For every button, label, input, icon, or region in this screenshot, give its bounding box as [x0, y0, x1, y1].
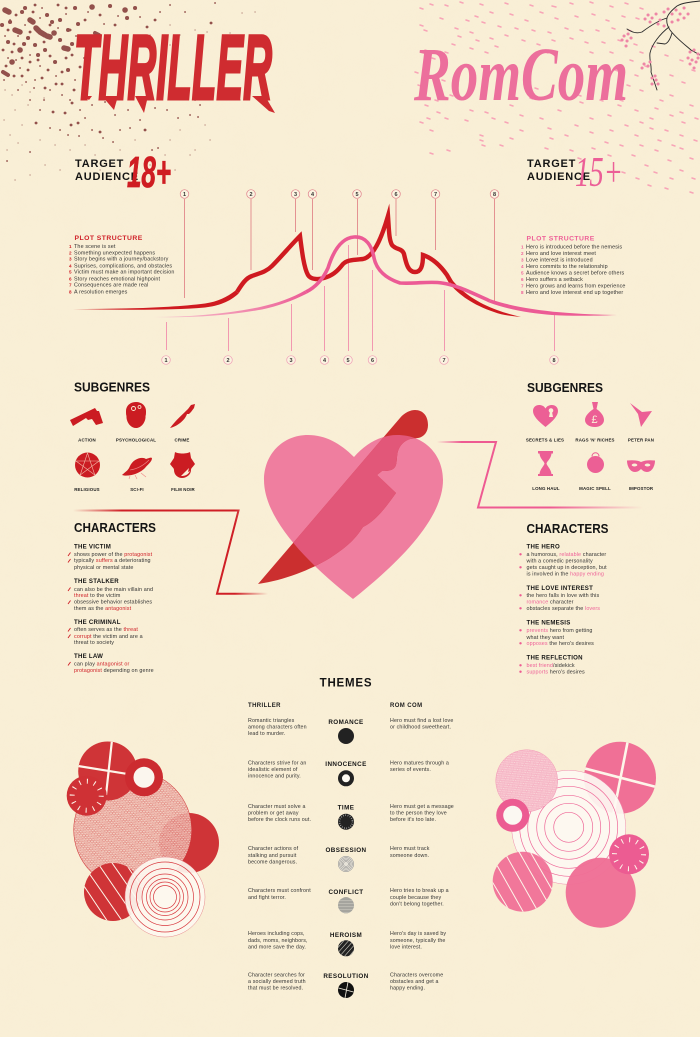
plot structure rom com: Audience knows a secret before others: [526, 270, 625, 276]
top numbered markers: 4: [311, 192, 315, 198]
plot structure thriller: A resolution emerges: [74, 289, 128, 295]
target audience rom com: AUDIENCE: [527, 171, 591, 183]
subgenres thriller: SUBGENRES: [74, 380, 150, 394]
characters rom com: is involved in the happy ending: [526, 572, 604, 578]
top numbered markers: 1: [183, 192, 186, 198]
characters thriller: threat to society: [74, 640, 114, 646]
plot structure rom com: Hero grows and learns from experience: [526, 284, 626, 290]
characters rom com: obstacles separate the lovers: [526, 606, 600, 612]
plot structure thriller: Story reaches emotional highpoint: [74, 276, 160, 282]
plot structure rom com: 6: [521, 277, 524, 282]
row: romance: or childhood sweetheart.: [390, 725, 451, 731]
red curve: [73, 216, 521, 317]
plot structure rom com: PLOT STRUCTURE: [526, 236, 595, 242]
row: innocence: series of events.: [390, 767, 431, 773]
plot structure rom com: 5: [521, 270, 524, 276]
row: conflict: [248, 888, 449, 913]
characters rom com: THE HERO: [526, 544, 560, 550]
row: romance: among characters often: [248, 725, 307, 731]
row: time: to the person they love: [390, 810, 447, 816]
characters thriller: CHARACTERS: [74, 521, 156, 535]
characters rom com: supports hero's desires: [526, 670, 585, 676]
plot structure rom com: 7: [521, 284, 524, 288]
label: SECRETS & LIES: [526, 438, 564, 442]
bottom numbered markers: 5: [346, 358, 350, 364]
characters rom com: gets caught up in deception, but: [526, 565, 607, 571]
characters thriller: often serves as the threat: [74, 627, 138, 633]
plot structure thriller: 2: [69, 250, 72, 255]
tick circle: [67, 776, 107, 816]
label: ACTION: [78, 438, 96, 442]
column heading rom com: ROM COM: [390, 703, 422, 709]
row: romance: lead to murder.: [248, 731, 285, 737]
characters rom com: THE LOVE INTEREST: [526, 585, 593, 592]
row: conflict: Characters must confront: [248, 888, 311, 894]
plot structure thriller: [69, 235, 174, 295]
patterned circle: [74, 771, 192, 889]
plot structure thriller: Something unexpected happens: [74, 250, 155, 256]
top numbered markers: 2: [249, 192, 253, 198]
icon: film noir: [170, 452, 195, 478]
row: conflict: couple because they: [390, 895, 441, 901]
cherry blossom branch: [622, 1, 700, 90]
icon: peter pan hat: [630, 403, 652, 427]
subgenres thriller: [70, 380, 196, 492]
label: RAGS 'N' RICHES: [575, 438, 615, 442]
icon: pentagram: [75, 452, 100, 478]
row: obsession: Character actions of: [248, 846, 299, 852]
bottom numbered markers: 8: [552, 358, 556, 364]
row: resolution: obstacles and get a: [390, 979, 439, 985]
row: time: Character must solve a: [248, 804, 306, 810]
cross circle: [78, 740, 140, 800]
circles thriller: [67, 740, 219, 937]
heading: THEMES: [320, 678, 372, 690]
characters rom com: prevents hero from getting: [526, 628, 593, 634]
pink petals: [415, 2, 698, 193]
row: resolution: [248, 972, 443, 998]
row: innocence: Hero matures through a: [390, 760, 449, 766]
characters thriller: THE LAW: [74, 653, 103, 660]
row: romance: ROMANCE: [328, 719, 364, 726]
plot structure rom com: 2: [521, 251, 524, 256]
characters thriller: THE STALKER: [74, 578, 119, 585]
plot structure thriller: Victim must make an important decision: [74, 270, 174, 276]
row: conflict: don't belong together.: [390, 902, 444, 908]
solid circle: [566, 858, 636, 928]
plot structure thriller: The scene is set: [74, 244, 116, 250]
concentric rings: [125, 857, 205, 937]
plot structure rom com: Hero and love interest meet: [526, 251, 596, 257]
characters thriller: obsessive behavior establishes: [74, 600, 152, 606]
plot structure thriller: Suprises, complications, and obstacles: [74, 263, 172, 269]
plot structure thriller: 4: [69, 263, 72, 268]
row: obsession: OBSESSION: [325, 847, 367, 854]
icon: mask: [627, 460, 655, 472]
plot structure rom com: 1: [521, 245, 524, 250]
row: innocence: Characters strive for an: [248, 760, 306, 766]
target audience rom com: 15+: [575, 150, 623, 196]
top numbered markers: 8: [493, 192, 496, 198]
row: heroism: dads, moms, neighbors,: [248, 938, 308, 944]
plot structure thriller: Consequences are made real: [74, 283, 148, 289]
label: PETER PAN: [628, 438, 654, 442]
ring circle: [496, 799, 529, 832]
icon: money bag: £: [591, 414, 598, 426]
label: RELIGIOUS: [74, 487, 100, 492]
row: heroism: [248, 931, 446, 959]
icon: magic spell: [587, 453, 604, 473]
bottom numbered markers: 2: [226, 358, 230, 364]
row: obsession: stalking and pursuit: [248, 853, 297, 859]
label: FILM NOIR: [171, 487, 196, 492]
plot structure thriller: PLOT STRUCTURE: [74, 235, 143, 242]
characters thriller: physical or mental state: [74, 565, 134, 571]
label: CRIME: [175, 438, 189, 442]
plot structure rom com: Hero suffers a setback: [526, 277, 583, 283]
top numbered markers: [180, 190, 499, 198]
target audience thriller: 18+: [127, 148, 171, 197]
top numbered markers: 5: [355, 192, 359, 198]
plot structure thriller: 1: [69, 244, 72, 249]
plot structure rom com: [521, 236, 626, 296]
marker lines rom com: [166, 245, 554, 351]
plot structure thriller: 5: [69, 270, 72, 275]
row: heroism: and more save the day.: [248, 944, 306, 950]
row: time: before the clock runs out.: [248, 817, 311, 823]
bottom numbered markers: [162, 356, 558, 364]
row: heroism: Hero's day is saved by: [390, 931, 446, 937]
label: SCI-FI: [130, 487, 144, 492]
circles rom com: [490, 740, 660, 928]
characters thriller: THE VICTIM: [74, 544, 111, 550]
characters thriller: shows power of the protagonist: [74, 552, 153, 558]
characters thriller: corrupt the victim and are a: [74, 634, 143, 640]
icon: gun: [70, 408, 103, 426]
row: resolution: RESOLUTION: [323, 973, 369, 980]
row: innocence: [248, 760, 449, 784]
row: heroism: Heroes including cops,: [248, 931, 305, 937]
row: heroism: HEROISM: [330, 932, 362, 939]
label: PSYCHOLOGICAL: [116, 438, 156, 442]
pink curve: [153, 237, 617, 317]
icon: heart with keyhole: [533, 405, 558, 427]
label: IMPOSTOR: [629, 486, 654, 491]
bullets: [68, 552, 70, 666]
row: obsession: become dangerous.: [248, 860, 297, 866]
characters rom com: THE NEMESIS: [526, 620, 571, 626]
bottom numbered markers: 6: [371, 358, 374, 364]
row: innocence: idealistic element of: [248, 767, 298, 773]
row: resolution: that must be resolved.: [248, 986, 303, 992]
solid circle: [159, 813, 219, 873]
plot structure thriller: 8: [69, 289, 72, 294]
top numbered markers: 3: [294, 192, 297, 198]
cross circle: [584, 742, 656, 814]
characters thriller: [68, 521, 156, 674]
label: LONG HAUL: [532, 486, 560, 491]
themes table: [248, 678, 454, 998]
bottom numbered markers: 7: [442, 358, 446, 364]
characters rom com: a humorous, relatable character: [526, 552, 606, 558]
row: time: [248, 804, 454, 830]
connector line thriller: [73, 510, 268, 594]
plot structure rom com: Hero is introduced before the nemesis: [526, 245, 622, 251]
characters rom com: best friend/sidekick: [526, 663, 575, 669]
row: resolution: Character searches for: [248, 972, 305, 978]
characters rom com: [519, 522, 608, 676]
subgenres rom com: SUBGENRES: [527, 381, 603, 395]
ring circle: [125, 758, 163, 796]
subgenres rom com: [526, 381, 655, 491]
characters thriller: typically suffers a deteriorating: [74, 558, 151, 564]
target audience rom com: TARGET: [527, 158, 576, 170]
characters rom com: THE REFLECTION: [526, 654, 583, 662]
characters rom com: with a comedic personality: [526, 558, 593, 564]
row: obsession: [248, 846, 430, 872]
top numbered markers: 6: [394, 192, 398, 198]
bottom numbered markers: 3: [289, 358, 293, 364]
target audience rom com: [527, 150, 623, 196]
plot structure thriller: 3: [69, 257, 72, 262]
plot structure rom com: 3: [521, 258, 524, 263]
characters thriller: THE CRIMINAL: [74, 619, 121, 626]
row: conflict: Hero tries to break up a: [390, 888, 449, 894]
bottom numbered markers: 1: [164, 358, 168, 364]
plot structure rom com: Love interest is introduced: [526, 258, 593, 264]
row: obsession: Hero must track: [390, 846, 430, 852]
label: MAGIC SPELL: [579, 486, 611, 491]
bullets: [519, 553, 522, 673]
row: time: Hero must get a message: [390, 804, 454, 810]
row: time: TIME: [338, 804, 354, 811]
plot structure rom com: 4: [521, 264, 524, 269]
striped circle: [492, 852, 553, 912]
plot structure thriller: 7: [69, 283, 72, 288]
icon: ufo: [122, 458, 152, 479]
characters rom com: CHARACTERS: [526, 522, 608, 536]
row: resolution: happy ending.: [390, 986, 425, 992]
target audience thriller: TARGET: [75, 158, 124, 170]
row: resolution: Characters overcome: [390, 972, 443, 978]
plot structure thriller: Story begins with a journey/backstory: [74, 257, 169, 263]
heart: [264, 435, 443, 599]
striped circle: [84, 863, 142, 921]
blood splatter: [2, 3, 255, 180]
characters rom com: opposes the hero's desires: [526, 641, 594, 647]
row: innocence: innocence and purity.: [248, 774, 301, 780]
tick circle: [609, 834, 649, 874]
target audience thriller: [75, 148, 171, 197]
plot structure rom com: Hero commits to the relationship: [526, 264, 608, 270]
row: obsession: someone down.: [390, 853, 429, 859]
target audience thriller: AUDIENCE: [75, 171, 139, 183]
row: romance: [248, 718, 453, 744]
marker lines thriller: [184, 199, 494, 302]
characters thriller: can play antagonist or: [74, 662, 129, 668]
characters thriller: threat to the victim: [74, 593, 121, 599]
plot structure thriller: 6: [69, 276, 72, 281]
row: time: before it's too late.: [390, 817, 436, 823]
plot chart: [73, 190, 617, 364]
patterned circle: [496, 750, 558, 812]
characters rom com: romance character: [526, 600, 574, 606]
characters rom com: what they want: [526, 635, 565, 641]
row: heroism: someone, typically the: [390, 938, 446, 944]
text: THRILLER: [74, 17, 272, 119]
characters thriller: them as the antagonist: [74, 606, 132, 612]
heart and knife: [258, 410, 443, 599]
column heading thriller: THRILLER: [248, 703, 281, 709]
concentric rings: [512, 770, 626, 884]
row: time: problem or get away: [248, 810, 299, 816]
bottom numbered markers: 4: [323, 358, 327, 364]
icon: crime knife: [170, 404, 195, 428]
icon: head with gears: [126, 402, 146, 428]
characters thriller: protagonist depending on genre: [74, 668, 154, 674]
plot structure rom com: Hero and love interest end up together: [526, 290, 623, 296]
knife: [258, 410, 428, 584]
characters rom com: the hero falls in love with this: [526, 593, 599, 599]
top numbered markers: 7: [434, 192, 437, 198]
characters thriller: can also be the main villain and: [74, 587, 153, 593]
row: resolution: a socially deemed truth: [248, 979, 306, 985]
knife and heart overlap: [294, 435, 416, 566]
plot structure rom com: 8: [521, 290, 524, 295]
row: conflict: and fight terror.: [248, 895, 286, 901]
row: heroism: love interest.: [390, 944, 422, 950]
row: romance: Hero must find a lost love: [390, 718, 453, 724]
icon: hourglass: [538, 451, 553, 476]
row: conflict: CONFLICT: [328, 889, 364, 896]
row: innocence: INNOCENCE: [325, 761, 367, 768]
row: romance: Romantic triangles: [248, 718, 295, 724]
title: Thriller: [74, 17, 275, 119]
connector line rom com: [437, 442, 643, 508]
